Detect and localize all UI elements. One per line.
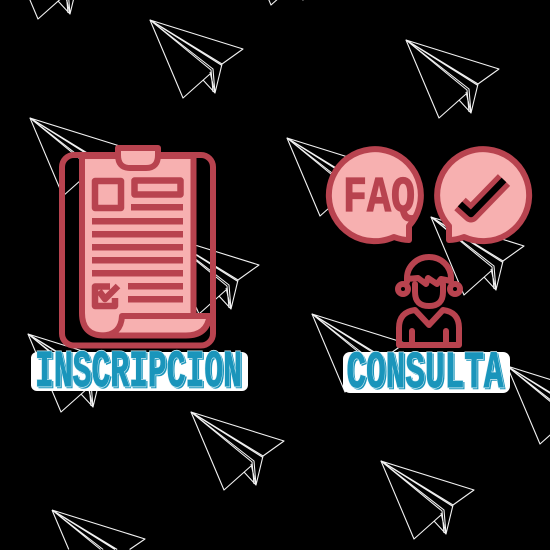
paper plane xyxy=(30,118,123,196)
arm lines xyxy=(412,331,446,345)
paper plane xyxy=(191,412,284,490)
FAQ text: FAQ xyxy=(343,170,415,227)
icon: person with headset xyxy=(398,257,460,345)
paper curl xyxy=(102,316,194,336)
paper plane xyxy=(150,20,243,98)
label: INSCRIPCION: INSCRIPCION xyxy=(35,343,242,402)
face xyxy=(415,284,443,306)
paper plane xyxy=(406,40,499,118)
label: INSCRIPCION xyxy=(31,343,248,404)
clipboard board xyxy=(62,155,213,346)
check mark xyxy=(99,286,118,299)
name field xyxy=(134,180,180,194)
paper plane xyxy=(5,0,98,19)
icon: check speech bubble xyxy=(437,149,529,241)
icon: FAQ speech bubble xyxy=(329,149,421,241)
bubble xyxy=(329,149,421,241)
paper plane xyxy=(28,334,121,412)
paper plane xyxy=(381,461,474,539)
check mark xyxy=(460,180,504,214)
paper plane cut by the bottom edge xyxy=(52,510,145,550)
form lines xyxy=(92,204,183,302)
paper plane xyxy=(507,366,550,444)
paper plane xyxy=(238,0,331,5)
bubble xyxy=(437,149,529,241)
paper plane xyxy=(431,217,524,295)
paper plane xyxy=(287,138,380,216)
paper plane xyxy=(312,314,405,392)
hair xyxy=(407,257,451,282)
label: INSCRIPCION: INSCRIPCION xyxy=(36,344,243,404)
label: INSCRIPCION: INSCRIPCION xyxy=(35,343,242,402)
torso xyxy=(399,310,459,345)
paper plane xyxy=(166,236,259,314)
fringe xyxy=(407,278,451,284)
icon: clipboard with form xyxy=(62,148,213,346)
photo box xyxy=(95,181,121,208)
clip xyxy=(118,148,158,168)
check box xyxy=(95,286,115,306)
ears xyxy=(398,284,408,294)
paper sheet xyxy=(82,156,210,336)
